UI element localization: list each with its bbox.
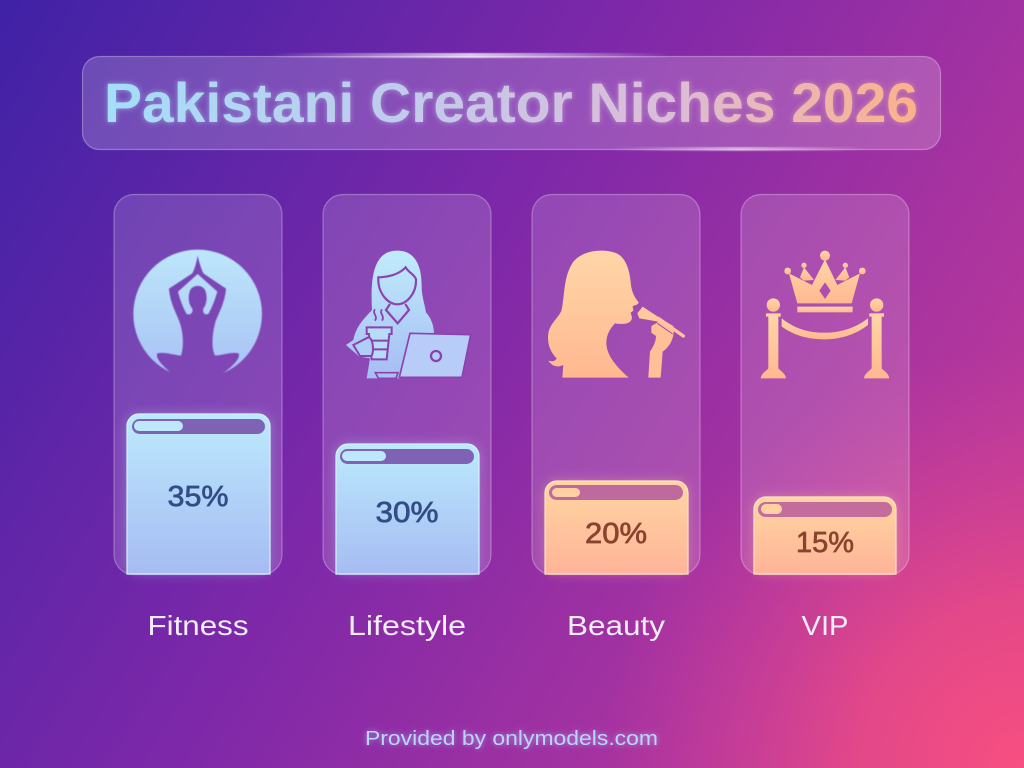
label: Fitness: Fitness	[148, 610, 248, 641]
bar: VIP 15%	[754, 497, 896, 574]
icon: yoga figure in circle	[132, 248, 263, 373]
panel: VIP card	[741, 194, 909, 574]
icon: woman with coffee and laptop	[346, 251, 471, 378]
value: 15%: 15%	[796, 527, 854, 559]
footer credit: Provided by onlymodels.com	[365, 728, 658, 750]
panel: Lifestyle card	[323, 194, 491, 574]
panel: title banner	[82, 53, 940, 151]
bar: Fitness 35%	[127, 414, 270, 574]
title glow: Pakistani Creator Niches 2026	[104, 71, 918, 134]
label: Beauty: Beauty	[567, 610, 665, 641]
panel: Fitness card	[113, 194, 283, 580]
bar: Beauty 20%	[545, 481, 688, 574]
label: Lifestyle: Lifestyle	[348, 610, 466, 641]
bar: Lifestyle 30%	[336, 444, 479, 574]
footer credit: Provided by onlymodels.com	[365, 728, 658, 750]
value: 30%: 30%	[376, 497, 438, 529]
title: Pakistani Creator Niches 2026	[104, 71, 918, 134]
panel: Beauty card	[532, 194, 700, 574]
icon: crown and velvet rope	[761, 251, 889, 378]
label: VIP: VIP	[802, 610, 848, 641]
value: 35%: 35%	[168, 481, 228, 513]
value: 20%: 20%	[585, 518, 647, 550]
coffee cup	[367, 327, 392, 359]
icon: woman applying makeup brush	[548, 251, 683, 378]
